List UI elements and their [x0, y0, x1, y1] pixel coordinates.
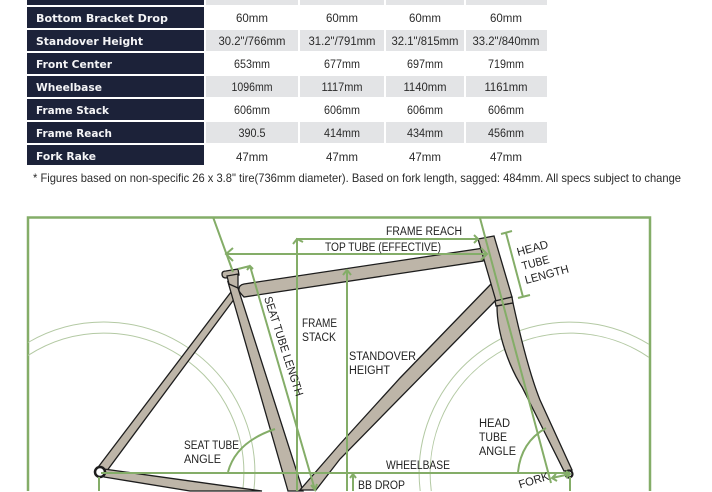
row: front center [27, 53, 524, 74]
row: bottom bracket drop: 60mm [490, 11, 522, 25]
head tube [478, 236, 512, 301]
row: standover height: 31.2"/791mm [308, 34, 376, 48]
row: standover height: 32.1"/815mm [392, 34, 458, 48]
row: standover height: Standover Height [36, 36, 143, 48]
top tube [239, 248, 484, 297]
row: wheelbase [27, 76, 547, 97]
label: wheelbase: WHEELBASE [386, 460, 450, 472]
seat collar [222, 269, 239, 278]
row: frame stack [27, 99, 524, 120]
row: bottom bracket drop: 60mm [326, 11, 358, 25]
row: frame stack: 606mm [324, 103, 360, 117]
row: bottom bracket drop: Bottom Bracket Drop [36, 13, 169, 25]
label: head tube angle: TUBE [479, 432, 507, 444]
label: head tube length: TUBE [521, 254, 551, 273]
rear and front axle verticals [99, 477, 570, 491]
row: fork rake: 47mm [490, 150, 522, 164]
row: frame reach: Frame Reach [36, 128, 112, 140]
row: fork rake: 47mm [236, 150, 268, 164]
dimension lines [99, 217, 570, 491]
label: seat tube angle [184, 440, 239, 466]
label: frame stack: STACK [302, 332, 336, 344]
label: top tube: TOP TUBE (EFFECTIVE) [325, 242, 441, 254]
wheels [28, 322, 649, 491]
seat stay [99, 292, 235, 472]
wheelbase line [101, 472, 570, 474]
label: standover height [349, 351, 416, 377]
row: front center: 653mm [234, 57, 270, 71]
row: frame reach [27, 122, 547, 143]
fork [497, 303, 572, 471]
row: wheelbase: 1140mm [404, 80, 447, 94]
top tube effective [226, 248, 487, 261]
footnote: * Figures based on non-specific 26 x 3.8" tire(736mm diameter). Based on fork length, sagged: 484mm. All specs subject to change [33, 171, 681, 185]
label: head tube length: HEAD [516, 239, 550, 259]
row: wheelbase: 1096mm [232, 80, 273, 94]
seat tube length [238, 266, 317, 490]
geometry diagram [28, 217, 650, 492]
labels [184, 226, 570, 492]
label: seat tube angle: SEAT TUBE [184, 440, 239, 452]
row: wheelbase: Wheelbase [36, 82, 102, 94]
seat tube angle arc [228, 429, 275, 472]
seat tube [228, 282, 303, 491]
row: front center: Front Center [36, 59, 113, 71]
label: head tube angle: ANGLE [479, 446, 516, 458]
row: fork rake: 47mm [409, 150, 441, 164]
label: frame stack: FRAME [302, 318, 337, 330]
seat tube axis [213, 217, 233, 272]
rear dropout [95, 467, 105, 477]
chain stay [104, 469, 262, 491]
label: head tube angle [479, 418, 516, 458]
row: frame reach: 434mm [407, 126, 443, 140]
row: standover height: 30.2"/766mm [218, 34, 286, 48]
standover height [343, 270, 351, 491]
front dropout [566, 470, 572, 478]
label: head tube length: LENGTH [524, 264, 570, 287]
row: bottom bracket drop: 60mm [236, 11, 268, 25]
headset ring [495, 297, 513, 306]
label: bb drop: BB DROP [358, 480, 405, 492]
row: frame stack: Frame Stack [36, 105, 110, 117]
label: head tube length [516, 239, 570, 287]
label: seat tube angle: ANGLE [184, 454, 221, 466]
row: frame reach: 414mm [324, 126, 360, 140]
row: frame stack: 606mm [488, 103, 524, 117]
head tube axis [480, 218, 551, 483]
row: frame stack: 606mm [234, 103, 270, 117]
head tube length [501, 231, 530, 298]
frame stack and frame reach [293, 235, 478, 491]
specification table [27, 0, 547, 165]
bicycle frame [95, 236, 572, 491]
label: frame reach: FRAME REACH [386, 226, 462, 238]
row: fork rake: Fork Rake [36, 151, 96, 163]
label: standover height: STANDOVER [349, 351, 416, 363]
diagram border [28, 218, 650, 491]
row: frame reach: 390.5 [238, 126, 266, 140]
row: bottom bracket drop: 60mm [409, 11, 441, 25]
row: fork rake: 47mm [326, 150, 358, 164]
label: seat tube length: SEAT TUBE LENGTH [261, 295, 305, 398]
row: frame stack: 606mm [407, 103, 443, 117]
row: front center: 677mm [324, 57, 360, 71]
head tube angle arc [518, 428, 546, 472]
row: standover height: 33.2"/840mm [472, 34, 540, 48]
label: fork rake: FORK [517, 471, 551, 491]
down tube [300, 284, 496, 490]
label: frame stack [302, 318, 337, 344]
row: wheelbase: 1161mm [484, 80, 528, 94]
row: standover height [27, 30, 547, 51]
row: bottom bracket drop [27, 7, 522, 28]
row: front center: 697mm [407, 57, 443, 71]
row: frame reach: 456mm [488, 126, 524, 140]
row: wheelbase: 1117mm [322, 80, 363, 94]
label: head tube angle: HEAD [479, 418, 510, 430]
fork rake [552, 471, 570, 481]
label: standover height: HEIGHT [349, 365, 390, 377]
row: front center: 719mm [488, 57, 524, 71]
row: fork rake [27, 145, 522, 165]
bb drop arrow [350, 474, 356, 491]
